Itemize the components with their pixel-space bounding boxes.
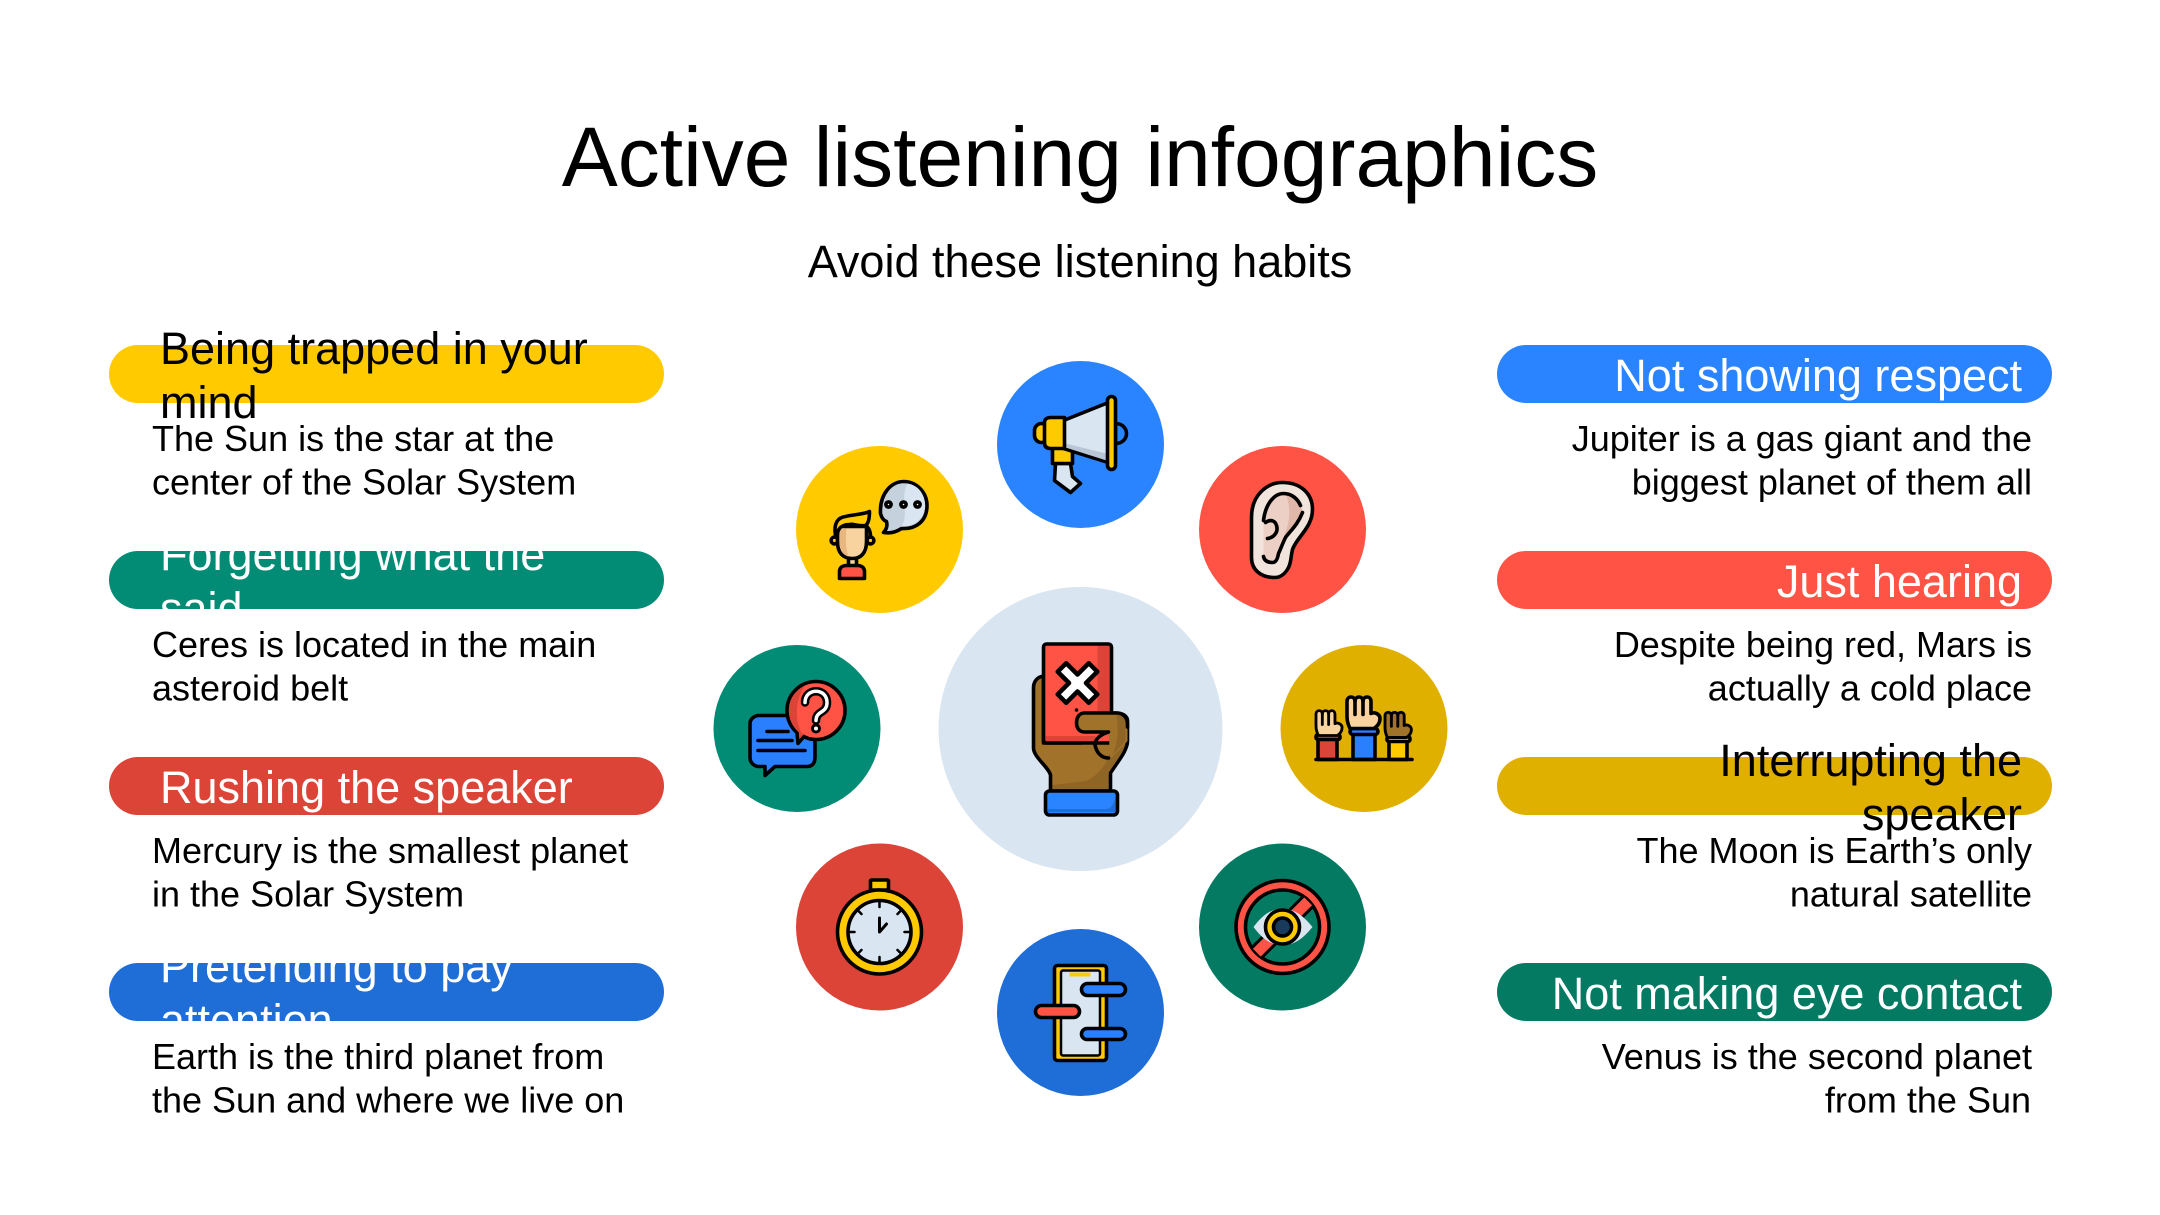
description: center of the Solar System (152, 461, 576, 502)
icon: central hand holding red card (938, 587, 1222, 871)
panel: rushing the speaker (109, 757, 664, 914)
heading: Not making eye contact (1552, 968, 2022, 1019)
heading: Interrupting the (1719, 735, 2022, 786)
description: natural satellite (1790, 873, 2032, 914)
panel: pretending to pay attention (109, 941, 664, 1120)
pill (109, 551, 664, 609)
pill (1497, 345, 2052, 403)
heading: mind (160, 377, 258, 428)
icon: ear on coral circle (1199, 446, 1366, 613)
heading: Pretending to pay (160, 941, 513, 992)
icon: megaphone on blue circle (997, 361, 1164, 528)
heading: Rushing the speaker (160, 762, 573, 813)
pill (1497, 757, 2052, 815)
title: Active listening infographics (562, 110, 1598, 204)
panel: not showing respect (1497, 345, 2052, 502)
description: Venus is the second planet (1602, 1036, 2032, 1077)
heading: speaker (1862, 789, 2022, 840)
pill (109, 963, 664, 1021)
description: The Moon is Earth’s only (1636, 830, 2032, 871)
pill (1497, 551, 2052, 609)
icon: man speaking with speech bubble on yellow circle (796, 446, 963, 613)
heading: Not showing respect (1614, 350, 2022, 401)
pill (109, 345, 664, 403)
description: in the Solar System (152, 873, 464, 914)
description: biggest planet of them all (1632, 461, 2032, 502)
panel: forgetting what the speaker said (109, 529, 664, 708)
panel: not making eye contact (1497, 963, 2052, 1120)
panel: being trapped in your mind (109, 323, 664, 502)
icon: phone with message bubbles on blue circle (997, 929, 1164, 1096)
panel: interrupting the speaker (1497, 735, 2052, 914)
heading: Forgetting what the (160, 529, 545, 580)
heading: said (160, 583, 243, 634)
description: Earth is the third planet from (152, 1036, 604, 1077)
description: The Sun is the star at the (152, 418, 554, 459)
description: from the Sun (1825, 1079, 2031, 1120)
heading: attention (160, 995, 333, 1046)
subtitle: Avoid these listening habits (808, 236, 1352, 287)
heading: Being trapped in your (160, 323, 588, 374)
description: Despite being red, Mars is (1614, 624, 2032, 665)
icon: eye with prohibition sign on dark green circle (1199, 844, 1366, 1010)
icon: question chat bubbles on green circle (714, 645, 880, 812)
icon: stopwatch on red circle (796, 844, 963, 1010)
description: the Sun and where we live on (152, 1079, 624, 1120)
description: Jupiter is a gas giant and the (1572, 418, 2032, 459)
pill (1497, 963, 2052, 1021)
pill (109, 757, 664, 815)
description: asteroid belt (152, 667, 348, 708)
description: Mercury is the smallest planet (152, 830, 628, 871)
panel: just hearing (1497, 551, 2052, 708)
heading: Just hearing (1777, 556, 2022, 607)
description: Ceres is located in the main (152, 624, 596, 665)
description: actually a cold place (1708, 667, 2032, 708)
icon: raised hands on gold circle (1280, 645, 1448, 812)
